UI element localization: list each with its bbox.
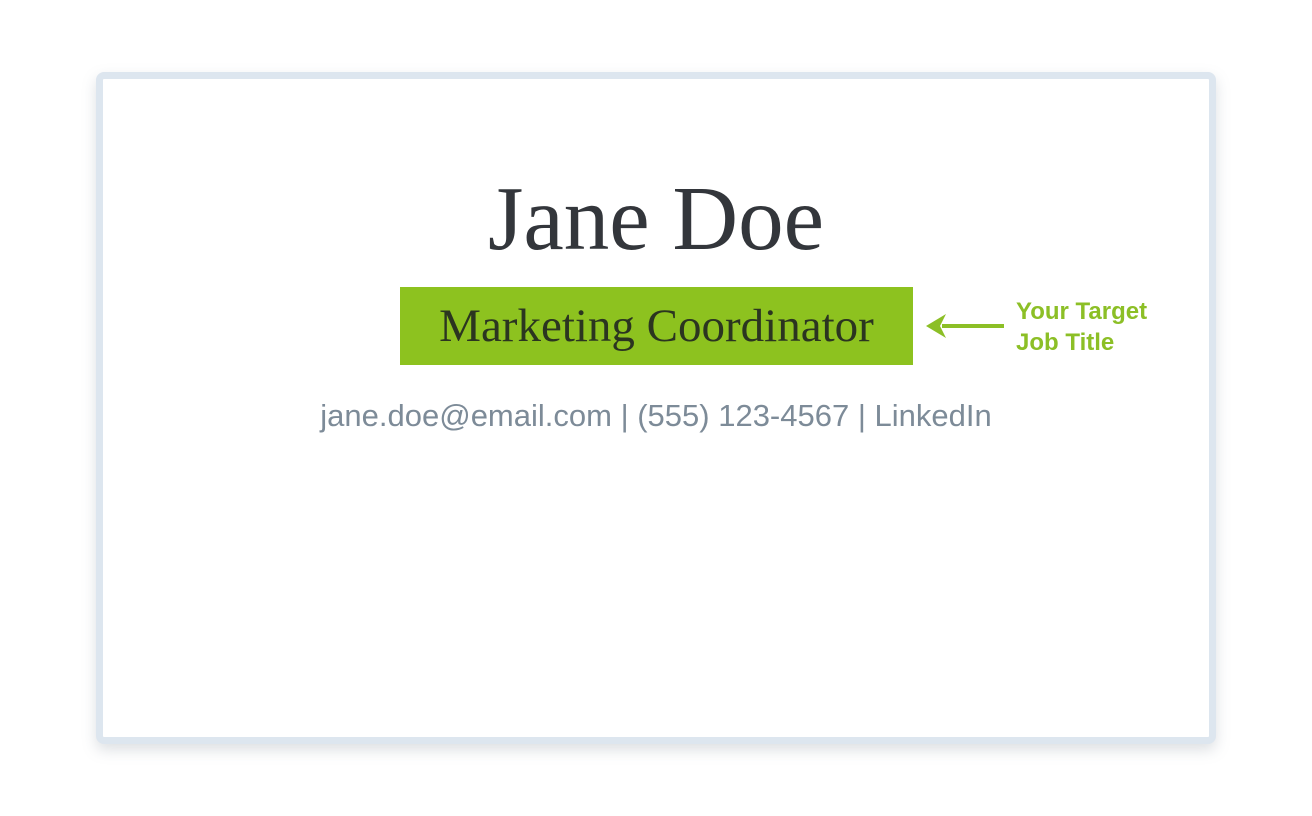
highlighted job title <box>400 287 913 365</box>
heading: name: Jane Doe <box>488 168 824 269</box>
arrow <box>926 314 1004 338</box>
callout label <box>1016 298 1147 356</box>
contact line: jane.doe@email.com | (555) 123-4567 | LinkedIn <box>320 398 992 433</box>
panel: resume card <box>96 72 1216 744</box>
highlighted job title: Marketing Coordinator <box>439 300 874 352</box>
callout label: Your Target <box>1016 298 1147 325</box>
callout label: Job Title <box>1016 329 1114 356</box>
